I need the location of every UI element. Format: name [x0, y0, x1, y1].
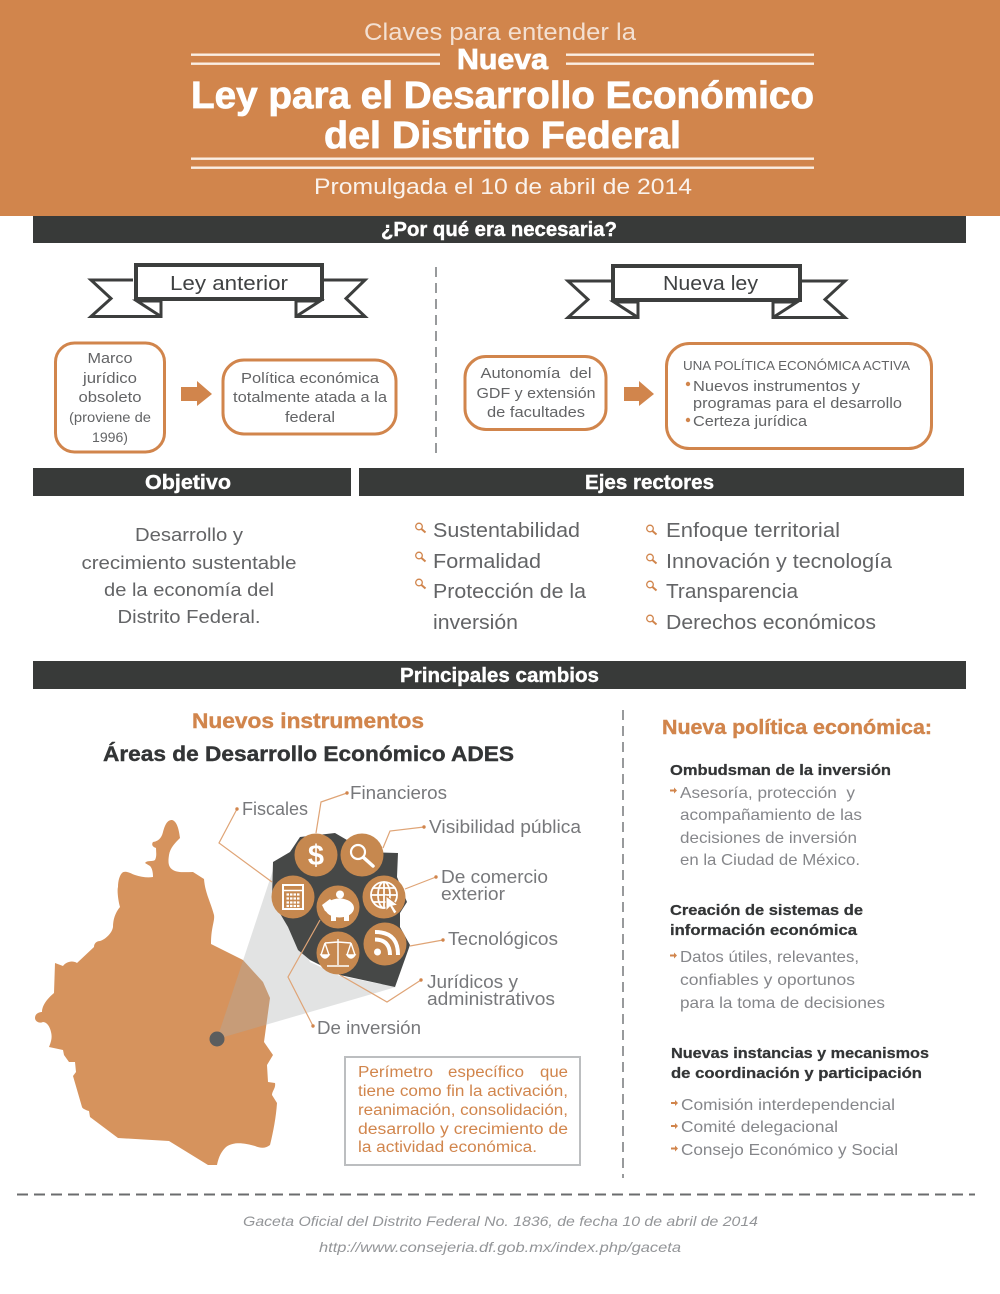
section bar: principales cambios: Principales cambios	[400, 665, 599, 687]
box: política económica: federal	[285, 409, 335, 426]
header banner: del Distrito Federal	[324, 115, 681, 157]
section bar: objetivo: Objetivo	[145, 472, 231, 494]
icon: piggy bank	[316, 886, 360, 928]
label: visibilidad pública: Visibilidad pública	[429, 817, 582, 837]
map: Distrito Federal	[35, 820, 277, 1165]
icon: dollar	[294, 834, 338, 876]
block: ombudsman	[670, 762, 891, 869]
arrow	[624, 381, 654, 406]
icon: rss	[364, 922, 406, 966]
ribbon: nueva ley: Nueva ley	[663, 273, 758, 295]
section bar: por qué era necesaria	[33, 216, 966, 243]
ribbon: ley anterior: Ley anterior	[170, 273, 288, 295]
block: sistemas de información: para la toma de decisiones	[680, 995, 885, 1012]
ribbon: ley anterior	[91, 265, 365, 316]
location dot	[210, 1032, 224, 1046]
callout: perímetro: reanimación, consolidación,	[358, 1102, 568, 1119]
box: marco jurídico	[56, 343, 164, 452]
block: ombudsman: Asesoría, protección y	[680, 785, 855, 802]
label: jurídicos y administrativos	[427, 972, 555, 1009]
box: política económica activa: programas para el desarrollo	[693, 395, 902, 412]
header banner: Claves para entender la	[364, 19, 637, 46]
section bar: por qué era necesaria: ¿Por qué era necesaria?	[381, 219, 617, 241]
icon: globe with cursor	[362, 876, 406, 918]
block: sistemas de información: Creación de sistemas de	[670, 902, 863, 919]
box: marco jurídico: (proviene de	[69, 409, 151, 425]
callout: perímetro: que	[540, 1064, 568, 1081]
block: ombudsman: acompañamiento de las	[680, 807, 862, 824]
block: instancias y mecanismos: Consejo Económico y Social	[681, 1142, 898, 1159]
header banner: Promulgada el 10 de abril de 2014	[314, 174, 692, 199]
callout: perímetro: Perímetro	[358, 1064, 433, 1081]
section bar: ejes rectores	[359, 468, 964, 496]
label: jurídicos y administrativos: Jurídicos y	[427, 972, 518, 992]
box: política económica	[223, 360, 396, 434]
callout: perímetro: desarrollo y crecimiento de	[358, 1121, 568, 1138]
dark detail area	[272, 833, 410, 987]
ejes rectores list: Innovación y tecnología	[666, 551, 893, 573]
ejes rectores list: Protección de la	[433, 581, 587, 603]
block: sistemas de información: información económica	[670, 922, 858, 939]
icon: scales	[316, 932, 360, 974]
connector lines	[219, 793, 443, 1026]
block: sistemas de información	[670, 902, 885, 1012]
heading: áreas de desarrollo: Áreas de Desarrollo Económico ADES	[103, 743, 514, 766]
header banner: Nueva	[457, 44, 549, 76]
ejes rectores list: Enfoque territorial	[666, 520, 840, 542]
label: de comercio exterior: De comercio	[441, 867, 548, 887]
label: de inversión: De inversión	[317, 1018, 421, 1038]
ejes rectores list: Sustentabilidad	[433, 520, 580, 542]
block: instancias y mecanismos: Nuevas instancias y mecanismos	[671, 1045, 929, 1062]
objetivo text: Distrito Federal.	[118, 606, 260, 627]
ejes rectores list: Derechos económicos	[666, 612, 876, 634]
icon: dollar: $	[308, 840, 324, 872]
box: política económica: totalmente atada a la	[233, 389, 388, 406]
block: sistemas de información: Datos útiles, relevantes,	[680, 949, 859, 966]
box: marco jurídico: jurídico	[82, 370, 137, 387]
box: autonomía	[465, 356, 606, 430]
callout: perímetro: tiene como fin la activación,	[358, 1083, 568, 1100]
callout: perímetro: la actividad económica.	[358, 1139, 537, 1156]
section bar: principales cambios	[33, 661, 966, 689]
ejes rectores list: Formalidad	[433, 551, 541, 573]
block: ombudsman: Ombudsman de la inversión	[670, 762, 891, 779]
ejes rectores list	[416, 520, 893, 634]
label: de comercio exterior	[441, 867, 548, 904]
label: fiscales: Fiscales	[242, 799, 308, 819]
block: instancias y mecanismos	[671, 1045, 929, 1159]
block: ombudsman: en la Ciudad de México.	[680, 852, 860, 869]
block: ombudsman: decisiones de inversión	[680, 830, 857, 847]
callout: perímetro	[345, 1057, 580, 1165]
box: autonomía: de facultades	[487, 404, 585, 421]
ejes rectores list: Transparencia	[666, 581, 799, 603]
block: sistemas de información: confiables y oportunos	[680, 972, 855, 989]
block: instancias y mecanismos: de coordinación y participación	[671, 1065, 922, 1082]
objetivo text: crecimiento sustentable	[82, 552, 296, 573]
ejes rectores list: inversión	[433, 612, 518, 634]
heading: nuevos instrumentos: Nuevos instrumentos	[192, 710, 424, 733]
arrow	[181, 381, 212, 406]
footer source: http://www.consejeria.df.gob.mx/index.php/gaceta	[319, 1239, 681, 1255]
footer source: Gaceta Oficial del Distrito Federal No. 1836, de fecha 10 de abril de 2014	[243, 1213, 758, 1229]
section bar: objetivo	[33, 468, 351, 496]
header banner: Ley para el Desarrollo Económico	[191, 75, 814, 117]
heading: nueva política económica: Nueva política económica:	[662, 716, 932, 739]
callout: perímetro: específico	[448, 1064, 524, 1081]
objetivo text	[82, 524, 296, 627]
label: de comercio exterior: exterior	[441, 884, 505, 904]
header banner	[0, 0, 1000, 216]
box: autonomía: Autonomía del	[480, 365, 592, 382]
icon: calculator	[272, 876, 314, 918]
box: marco jurídico: Marco	[88, 350, 132, 367]
label: tecnológicos: Tecnológicos	[448, 929, 558, 949]
box: marco jurídico: obsoleto	[78, 389, 142, 406]
box: política económica: Política económica	[241, 370, 380, 387]
box: marco jurídico: 1996)	[92, 429, 128, 445]
zoom cone	[217, 870, 396, 1039]
objetivo text: Desarrollo y	[135, 524, 244, 545]
label: financieros: Financieros	[350, 783, 447, 803]
footer source	[243, 1213, 758, 1255]
objetivo text: de la economía del	[104, 579, 274, 600]
ribbon: nueva ley	[568, 266, 845, 318]
label: jurídicos y administrativos: administrativos	[427, 989, 555, 1009]
box: política económica activa: Certeza jurídica	[693, 413, 808, 430]
block: instancias y mecanismos: Comité delegacional	[681, 1119, 838, 1136]
block: instancias y mecanismos: Comisión interdependencial	[681, 1097, 895, 1114]
box: autonomía: GDF y extensión	[476, 385, 596, 402]
icon: magnifier	[340, 834, 384, 876]
box: política económica activa: Nuevos instrumentos y	[693, 378, 861, 395]
section bar: ejes rectores: Ejes rectores	[585, 472, 714, 494]
box: política económica activa: UNA POLÍTICA ECONÓMICA ACTIVA	[683, 358, 910, 373]
box: política económica activa	[666, 344, 932, 448]
